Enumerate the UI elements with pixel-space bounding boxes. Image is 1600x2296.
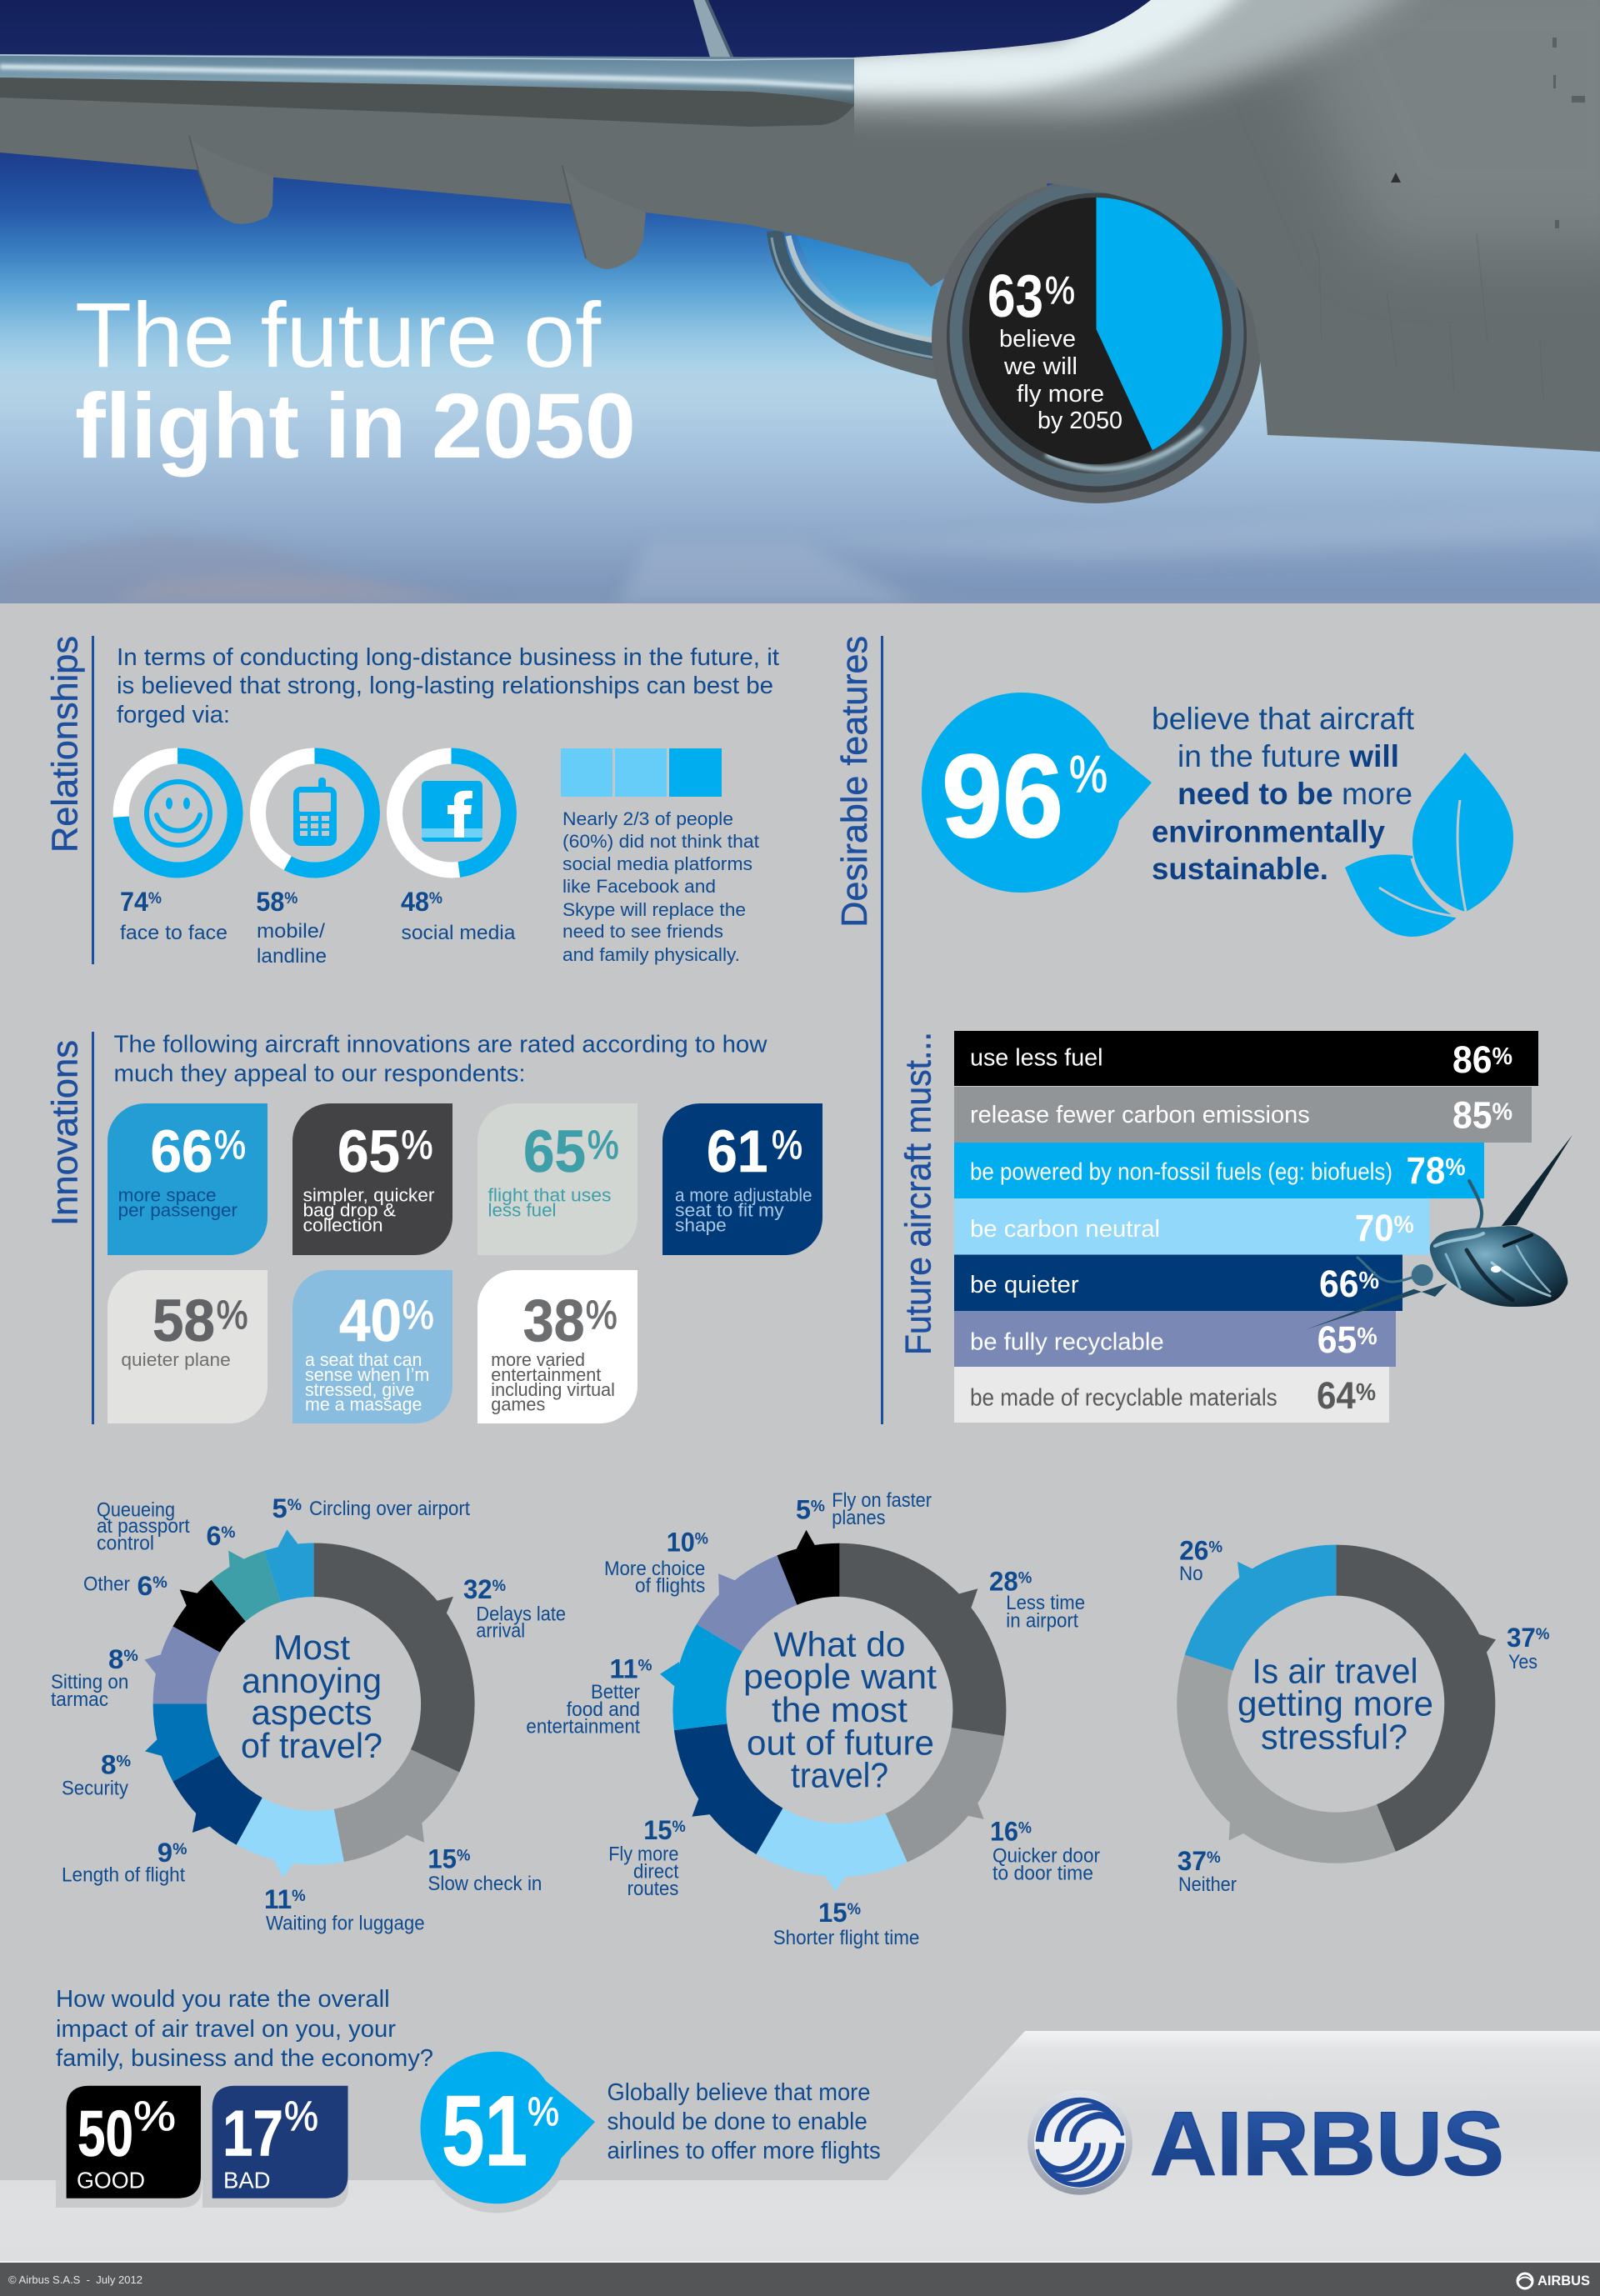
paragraph: social media replacing contact: (60%) did not think that — [562, 831, 760, 852]
engine pie caption: by 2050 — [1038, 408, 1122, 434]
sustainability statement — [1152, 702, 1415, 886]
speech bubble: 96% — [922, 693, 1152, 893]
donut labels: Delays late — [476, 1603, 566, 1625]
sustainability statement: believe that aircraft — [1152, 702, 1415, 736]
donut chart: what people want from future travel — [526, 1489, 1100, 1949]
innovations intro text — [113, 1032, 768, 1088]
donut labels: Slow check in — [428, 1873, 542, 1895]
relationships intro text: In terms of conducting long-distance business in the future, it — [117, 644, 779, 671]
engine pie caption: believe — [999, 326, 1076, 353]
segment pointers — [1229, 1562, 1496, 1840]
donut labels: direct — [633, 1861, 679, 1883]
donut labels: routes — [628, 1878, 678, 1900]
card: 65% simpler bag drop: % — [402, 1123, 433, 1168]
donut question: people want — [743, 1657, 937, 1696]
donut labels: % — [152, 1574, 168, 1592]
icon: mobile phone — [293, 778, 337, 846]
donut question — [1238, 1652, 1433, 1757]
donut question — [743, 1625, 937, 1795]
bar: be powered by non-fossil fuels — [954, 1143, 1484, 1198]
donut question: of travel? — [241, 1726, 382, 1765]
donut labels: % — [1207, 1849, 1221, 1867]
speech bubble: 96%: % — [1069, 746, 1108, 803]
bar: be made of recyclable materials: % — [1356, 1379, 1376, 1406]
speech bubble: 51%: % — [528, 2090, 559, 2134]
label: 48%: 48 — [401, 887, 431, 917]
donut labels: 26 — [1179, 1536, 1209, 1566]
label: face to face: face to face — [120, 922, 228, 944]
donut labels: to door time — [992, 1863, 1093, 1885]
bar: be powered by non-fossil fuels: 78 — [1407, 1149, 1448, 1192]
bar: be made of recyclable materials: be made of recyclable materials — [970, 1385, 1278, 1412]
card: 65% simpler bag drop: collection — [303, 1215, 383, 1235]
donut labels: Fly on faster — [832, 1489, 932, 1512]
card: 61% adjustable seat — [662, 1103, 822, 1255]
card: 17% bad: BAD — [223, 2168, 270, 2193]
statement text: should be done to enable — [607, 2108, 868, 2135]
bar: be carbon neutral: 70 — [1355, 1207, 1397, 1249]
donut labels: 5 — [796, 1494, 811, 1524]
bar: be made of recyclable materials — [954, 1367, 1389, 1423]
donut labels: 10 — [667, 1527, 696, 1557]
card: 40% massage seat: a seat that can — [305, 1349, 422, 1370]
card: 61% adjustable seat: a more adjustable — [675, 1185, 812, 1206]
donut labels: planes — [832, 1507, 886, 1529]
donut labels: Other — [83, 1573, 130, 1595]
statement text: Globally believe that more — [607, 2079, 870, 2106]
donut labels: % — [811, 1498, 825, 1515]
card: 66% more space: more space — [118, 1185, 217, 1206]
bar: be fully recyclable: % — [1357, 1323, 1378, 1350]
sustainability statement: sustainable. — [1152, 852, 1328, 886]
donut labels: % — [1536, 1626, 1549, 1643]
donut labels: 6 — [207, 1521, 221, 1551]
bar: be fully recyclable — [954, 1311, 1396, 1367]
card: 40% massage seat: 40 — [339, 1288, 402, 1354]
heading: innovations: Innovations — [45, 1040, 85, 1226]
relationships intro text: forged via: — [117, 702, 230, 728]
engine pie caption — [988, 263, 1122, 434]
donut question: What do — [773, 1625, 905, 1664]
donut question: stressful? — [1261, 1718, 1408, 1757]
logo wordmark: AIRBUS — [1150, 2093, 1504, 2194]
ring: 48% social media — [395, 756, 516, 944]
bar: be powered by non-fossil fuels: % — [1445, 1154, 1466, 1181]
sustainability statement: need to be more — [1178, 777, 1412, 811]
bar: use less fuel — [954, 1031, 1538, 1086]
icon: leaves — [1345, 753, 1513, 937]
bar: use less fuel: 86 — [1452, 1038, 1494, 1081]
donut question: aspects — [252, 1693, 372, 1732]
card: 65% simpler bag drop: bag drop & — [303, 1200, 396, 1221]
donut labels: Yes — [1508, 1651, 1538, 1673]
card: 61% adjustable seat: shape — [675, 1215, 727, 1235]
label: 58%: % — [284, 890, 298, 908]
donut labels: of flights — [635, 1574, 705, 1597]
donut labels: 6 — [137, 1571, 152, 1601]
card: 38% entertainment: games — [491, 1393, 545, 1415]
bar: be powered by non-fossil fuels: be powered by non-fossil fuels (eg: biofuels) — [970, 1159, 1392, 1186]
donut labels: arrival — [476, 1620, 525, 1643]
donut labels: More choice — [604, 1558, 705, 1580]
bar: release fewer carbon emissions: % — [1492, 1099, 1512, 1126]
card: 58% quieter plane: quieter plane — [121, 1349, 231, 1370]
card: 66% more space: % — [214, 1123, 246, 1168]
question text — [56, 1986, 433, 2072]
label: 74%: 74 — [120, 887, 150, 917]
donut labels: tarmac — [51, 1688, 108, 1711]
donut labels: % — [848, 1901, 861, 1918]
donut labels: Better — [591, 1681, 640, 1703]
donut labels: % — [292, 1888, 306, 1905]
paragraph: social media replacing contact: Nearly 2/3 of people — [562, 808, 733, 829]
label: 48%: % — [429, 890, 442, 908]
bar: be made of recyclable materials: 64 — [1317, 1374, 1358, 1417]
card: 61% adjustable seat: 61 — [707, 1119, 768, 1185]
donut labels: food and — [567, 1698, 640, 1721]
card: 17% bad: % — [284, 2093, 318, 2139]
title: flight in 2050 — [75, 375, 636, 478]
donut labels: Waiting for luggage — [266, 1913, 425, 1935]
card: 50% good: % — [133, 2093, 176, 2139]
fuselage — [833, 0, 1600, 452]
innovations intro text: much they appeal to our respondents: — [113, 1061, 525, 1088]
donut question: Is air travel — [1252, 1652, 1418, 1690]
engine fan with 63% pie chart — [969, 198, 1222, 473]
donut labels: 11 — [264, 1884, 292, 1914]
engine nacelle ring — [932, 178, 1262, 503]
donut segments — [1202, 1570, 1470, 1838]
segment pointers — [145, 1529, 453, 1878]
card: 65% simpler bag drop: 65 — [338, 1119, 400, 1185]
donut labels: % — [116, 1753, 131, 1770]
card: 61% adjustable seat: seat to fit my — [675, 1200, 784, 1221]
title — [75, 284, 636, 478]
bar: release fewer carbon emissions — [954, 1087, 1532, 1143]
donut labels: % — [123, 1648, 138, 1665]
card: 38% entertainment: % — [586, 1293, 618, 1338]
paragraph: social media replacing contact: and family physically. — [562, 944, 740, 965]
label: mobile/landline: landline — [257, 945, 327, 968]
donut chart: is air travel getting more stressful — [1178, 1536, 1549, 1896]
icon: smiley — [147, 782, 210, 845]
donut labels: Sitting on — [51, 1671, 128, 1693]
donut labels: Fly more — [608, 1843, 678, 1866]
donut labels — [526, 1489, 1100, 1949]
bar: be fully recyclable: 65 — [1318, 1318, 1359, 1361]
bar: be quieter: 66 — [1319, 1263, 1361, 1305]
bar: be carbon neutral — [954, 1198, 1430, 1255]
bar: use less fuel: use less fuel — [970, 1045, 1103, 1072]
label: social media: social media — [402, 922, 516, 944]
paragraph: social media replacing contact — [562, 808, 760, 965]
donut labels: 15 — [643, 1815, 673, 1845]
donut labels: Less time — [1006, 1592, 1085, 1614]
donut labels — [1178, 1536, 1549, 1896]
heading: desirable features: Desirable features — [834, 636, 875, 928]
sustainability statement: in the future will — [1178, 739, 1399, 773]
small airbus logo: AIRBUS — [1538, 2273, 1590, 2288]
statement text — [607, 2079, 881, 2164]
bar: be quieter — [954, 1255, 1402, 1311]
speech bubble: 51%: 51 — [442, 2075, 528, 2187]
footer band background — [0, 2031, 1600, 2263]
bar: be quieter: % — [1359, 1268, 1379, 1294]
donut labels: Quicker door — [992, 1845, 1100, 1867]
innovations intro text: The following aircraft innovations are rated according to how — [113, 1032, 768, 1058]
card: 65% simpler bag drop: simpler, quicker — [303, 1185, 435, 1206]
card: 17% bad — [202, 2086, 348, 2208]
donut labels: 8 — [108, 1644, 123, 1674]
paragraph: social media replacing contact: Skype will replace the — [562, 899, 746, 920]
card: 65% less fuel: less fuel — [488, 1200, 557, 1221]
label: 74%: % — [148, 890, 162, 908]
donut chart: most annoying aspects of travel — [51, 1493, 566, 1935]
donut segments — [180, 1570, 448, 1838]
donut labels: % — [288, 1497, 302, 1514]
hero panel: aircraft wing and sky — [0, 0, 1600, 603]
donut labels: No — [1179, 1563, 1203, 1585]
footer bar — [0, 2263, 1600, 2296]
donut labels: 9 — [158, 1838, 172, 1868]
donut labels: in airport — [1006, 1610, 1078, 1632]
donut question: the most — [772, 1690, 908, 1729]
card: 38% entertainment: entertainment — [491, 1364, 601, 1385]
question text: How would you rate the overall — [56, 1986, 390, 2013]
card: 17% bad: 17 — [222, 2097, 283, 2170]
card: 58% quieter plane — [108, 1270, 268, 1423]
wing leading edge — [0, 54, 854, 127]
donut question: out of future — [747, 1723, 934, 1763]
relationships intro text — [117, 644, 779, 728]
donut labels: % — [1208, 1539, 1222, 1557]
donut question: Most — [273, 1628, 350, 1667]
bar: release fewer carbon emissions: release fewer carbon emissions — [970, 1102, 1310, 1128]
donut labels: 37 — [1178, 1846, 1207, 1876]
card: 50% good — [56, 2086, 202, 2208]
donut labels: 16 — [990, 1817, 1020, 1847]
icon: futuristic aircraft — [1307, 1135, 1572, 1329]
question text: impact of air travel on you, your — [56, 2016, 396, 2043]
engine pie caption: we will — [1003, 353, 1078, 380]
bar: use less fuel: % — [1492, 1043, 1512, 1070]
question text: family, business and the economy? — [56, 2045, 433, 2072]
card: 40% massage seat — [292, 1270, 452, 1423]
paragraph: social media replacing contact: like Facebook and — [562, 876, 716, 897]
donut labels: at passport — [97, 1515, 190, 1538]
card: 66% more space: 66 — [150, 1119, 213, 1185]
label: mobile/landline — [257, 920, 327, 968]
donut labels: % — [638, 1658, 652, 1675]
donut labels: 15 — [818, 1898, 848, 1928]
card: 65% less fuel: 65 — [523, 1119, 586, 1185]
logo emblem — [1028, 2090, 1132, 2195]
segment pointers — [660, 1530, 984, 1892]
donut labels: Shorter flight time — [773, 1927, 919, 1949]
card: 58% quieter plane: % — [217, 1293, 248, 1338]
engine pie caption: fly more — [1017, 381, 1104, 408]
donut question: travel? — [791, 1756, 888, 1795]
card: 38% entertainment: more varied — [491, 1349, 585, 1370]
engine pie caption: % — [1045, 268, 1075, 312]
donut labels: 28 — [989, 1567, 1019, 1597]
icon: facebook — [422, 781, 482, 842]
card: 61% adjustable seat: % — [772, 1123, 802, 1168]
card: 66% more space — [108, 1103, 268, 1255]
donut labels: % — [492, 1578, 506, 1595]
heading: relationships: Relationships — [45, 636, 85, 853]
donut labels: % — [172, 1841, 188, 1858]
donut labels: entertainment — [526, 1716, 640, 1738]
heading: future aircraft must: Future aircraft must... — [898, 1032, 939, 1355]
speech bubble: 96%: 96 — [942, 730, 1063, 863]
donut labels: Length of flight — [62, 1863, 185, 1887]
relationships intro text: is believed that strong, long-lasting relationships can best be — [117, 673, 773, 699]
ring: 58% mobile/landline — [256, 756, 372, 968]
card: 40% massage seat: sense when I’m — [305, 1364, 429, 1385]
donut labels: Queueing — [97, 1498, 175, 1521]
label: mobile/landline: mobile/ — [257, 920, 325, 943]
card: 65% simpler bag drop — [292, 1103, 452, 1255]
bar: be carbon neutral: be carbon neutral — [970, 1216, 1160, 1243]
panel: relationships — [45, 636, 779, 968]
card: 40% massage seat: % — [402, 1293, 434, 1338]
card: 38% entertainment: 38 — [523, 1288, 585, 1354]
donut question: annoying — [242, 1661, 382, 1700]
card: 40% massage seat: stressed, give — [305, 1379, 414, 1400]
card: 38% entertainment — [478, 1270, 638, 1423]
donut question — [241, 1628, 382, 1765]
donut labels: 11 — [610, 1654, 638, 1684]
donut labels: Circling over airport — [309, 1498, 470, 1520]
speech bubble: 51% — [420, 2052, 595, 2213]
donut labels: 32 — [463, 1574, 493, 1604]
statement text: airlines to offer more flights — [607, 2138, 881, 2164]
panel: future aircraft must bar chart — [898, 1031, 1572, 1423]
donut labels: % — [1018, 1570, 1032, 1587]
card: 65% less fuel: flight that uses — [488, 1185, 612, 1206]
panel: desirable features — [834, 636, 1513, 1424]
paragraph: social media replacing contact: need to see friends — [562, 921, 723, 942]
label: 58%: 58 — [256, 887, 286, 917]
card: 50% good: 50 — [78, 2097, 133, 2170]
bar: be carbon neutral: % — [1394, 1212, 1414, 1238]
copyright: © Airbus S.A.S - July 2012 — [8, 2273, 142, 2286]
donut labels: % — [221, 1524, 236, 1542]
card: 66% more space: per passenger — [118, 1200, 238, 1221]
paragraph: social media replacing contact: social media platforms — [562, 853, 752, 874]
title: The future of — [75, 284, 601, 387]
donut labels: % — [457, 1847, 470, 1864]
card: 38% entertainment: including virtual — [491, 1379, 615, 1400]
donut labels: Security — [62, 1777, 128, 1799]
bar: be quieter: be quieter — [970, 1272, 1079, 1298]
donut labels: 15 — [428, 1843, 458, 1873]
card: 65% less fuel: % — [588, 1123, 619, 1168]
donut labels: 5 — [272, 1493, 287, 1523]
donut labels: % — [1018, 1820, 1032, 1837]
ring: 74% face to face — [120, 756, 235, 944]
logo: airbus — [1028, 2090, 1504, 2195]
engine pie caption: 63 — [988, 263, 1043, 330]
card: 50% good: GOOD — [77, 2168, 145, 2193]
card: 65% less fuel — [478, 1103, 638, 1255]
donut labels — [51, 1493, 566, 1935]
bar: release fewer carbon emissions: 85 — [1452, 1094, 1494, 1137]
panel: overall impact of air travel — [56, 1986, 881, 2213]
donut labels: % — [695, 1530, 708, 1548]
donut labels: % — [672, 1818, 686, 1836]
donut labels: Neither — [1178, 1873, 1237, 1896]
sustainability statement: environmentally — [1152, 815, 1385, 849]
donut labels: control — [97, 1532, 154, 1555]
donut labels: 8 — [101, 1750, 116, 1780]
donut segments — [699, 1570, 979, 1850]
donut labels: 37 — [1507, 1623, 1537, 1653]
squares: two of three — [561, 748, 722, 797]
donut question: getting more — [1238, 1683, 1433, 1723]
panel: innovations — [45, 1032, 822, 1424]
card: 40% massage seat: me a massage — [305, 1393, 422, 1415]
bar: be fully recyclable: be fully recyclable — [970, 1329, 1164, 1356]
card: 58% quieter plane: 58 — [152, 1288, 215, 1354]
